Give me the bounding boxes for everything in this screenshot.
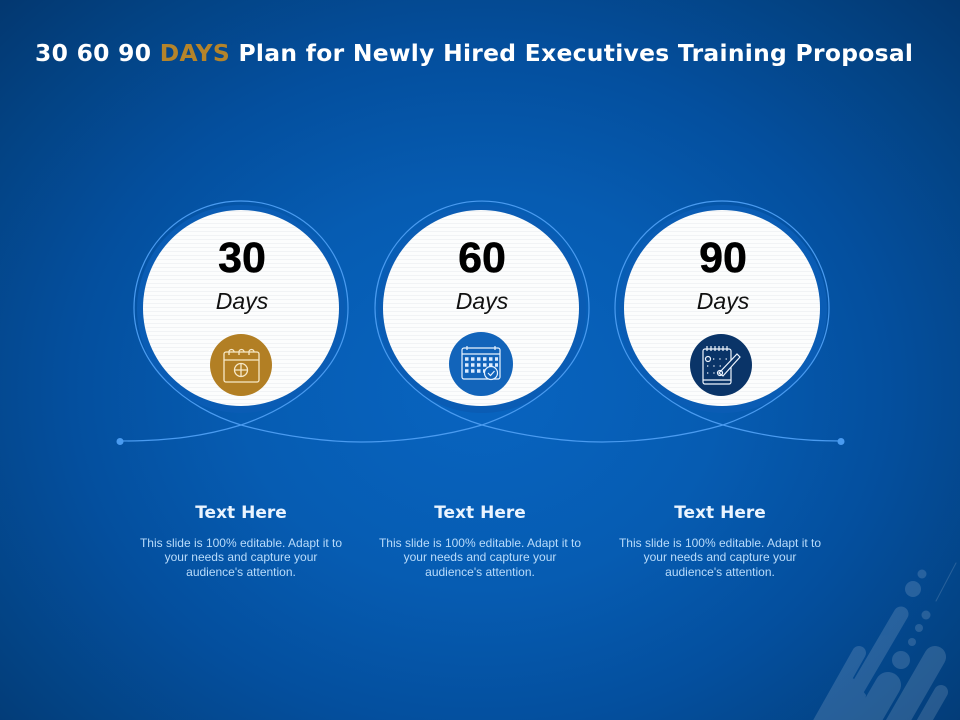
heading: column 2: Text Here [434, 503, 526, 523]
icon: calendar with ball [210, 334, 272, 396]
text block: column 3: your needs and capture your [644, 550, 796, 564]
text block: column 1: audience's attention. [186, 565, 296, 579]
title: 30 60 90 DAYS Plan for Newly Hired Executives Training Proposal [35, 39, 913, 67]
label: Days 2: Days [456, 288, 508, 314]
text block: column 3: This slide is 100% editable. Adapt it to [619, 536, 821, 550]
text block: column 3 [619, 536, 821, 579]
label: 30: 30 [218, 234, 266, 282]
label: 60: 60 [458, 234, 506, 282]
text block: column 2: your needs and capture your [404, 550, 556, 564]
label: 90: 90 [699, 234, 747, 282]
label: Days 1: Days [216, 288, 268, 314]
white circle 3 [624, 210, 820, 406]
line end dot left [116, 438, 124, 445]
white circle 1 [143, 210, 339, 406]
icon: notepad with pen [690, 334, 752, 396]
text block: column 1: your needs and capture your [165, 550, 317, 564]
ring disc 1 [137, 205, 345, 413]
icon: calendar with check [449, 332, 513, 396]
ring disc 3 [619, 205, 827, 413]
heading: column 1: Text Here [195, 503, 287, 523]
text block: column 2: This slide is 100% editable. Adapt it to [379, 536, 581, 550]
text block: column 2 [379, 536, 581, 579]
label: Days 3: Days [697, 288, 749, 314]
text block: column 2: audience's attention. [425, 565, 535, 579]
line end dot right [838, 438, 844, 445]
ring disc 2 [378, 205, 586, 413]
text block: column 1 [140, 536, 342, 579]
white circle 2 [383, 210, 579, 406]
heading: column 3: Text Here [674, 503, 766, 523]
decorative corner graphic [813, 562, 956, 720]
text block: column 3: audience's attention. [665, 565, 775, 579]
looping line [120, 201, 841, 442]
text block: column 1: This slide is 100% editable. Adapt it to [140, 536, 342, 550]
